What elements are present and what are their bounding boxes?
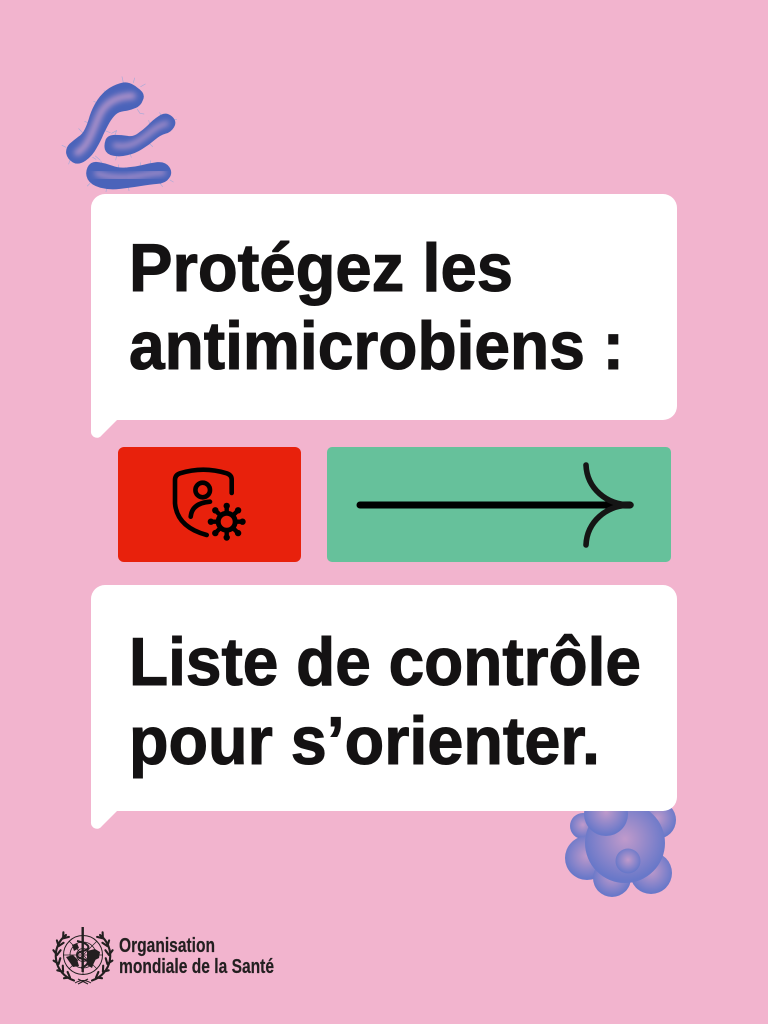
heading: bottom: pour s’orienter. bbox=[129, 703, 600, 779]
bacterium 3 bbox=[87, 163, 170, 188]
icon: WHO emblem bbox=[53, 927, 113, 984]
heading: top: Protégez les bbox=[129, 230, 513, 306]
icon: cell cluster bbox=[565, 792, 676, 897]
bacterium hairs bbox=[62, 77, 177, 192]
logo: WHO bbox=[53, 927, 274, 984]
heading: bottom: Liste de contrôle bbox=[129, 624, 641, 700]
arrow bbox=[360, 465, 631, 545]
heading: bottom bbox=[129, 624, 641, 779]
text: organisation name bbox=[119, 935, 274, 978]
bacterium 1 bbox=[67, 84, 143, 163]
heading: top: antimicrobiens : bbox=[129, 308, 624, 384]
panel: bottom speech bubble bbox=[91, 585, 677, 829]
icon: bacteria bbox=[62, 77, 177, 192]
text: organisation name: mondiale de la Santé bbox=[119, 956, 274, 978]
heading: top bbox=[129, 230, 624, 384]
panel: green arrow tile bbox=[327, 447, 671, 562]
text: organisation name: Organisation bbox=[119, 935, 215, 957]
icon: shield, person and virus bbox=[175, 470, 246, 541]
panel: top speech bubble bbox=[91, 194, 677, 438]
bacterium 2 bbox=[106, 115, 174, 155]
panel: red icon tile bbox=[118, 447, 301, 562]
